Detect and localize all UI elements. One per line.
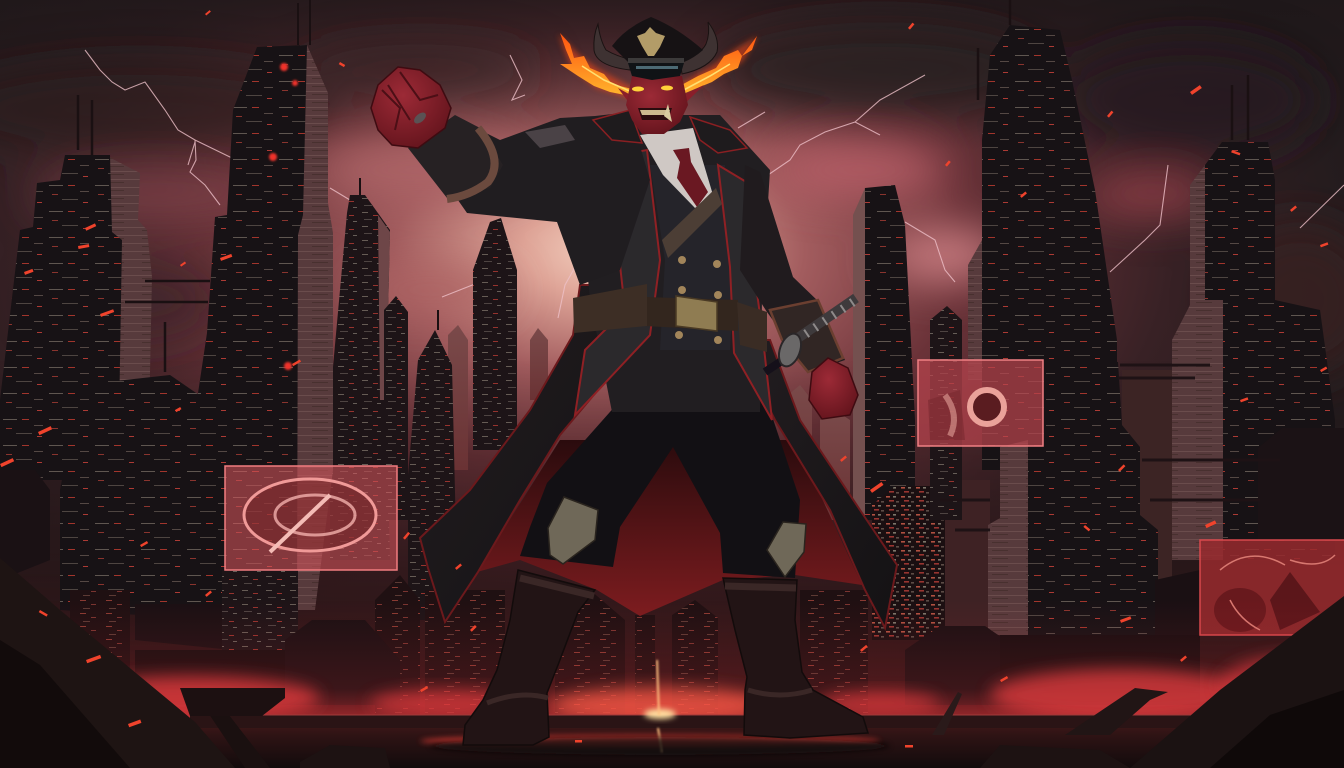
right foreground towers — [940, 0, 1344, 640]
ears — [618, 85, 704, 112]
rubble: left beams — [0, 558, 285, 768]
glowing eyes — [632, 86, 673, 92]
coat lining — [477, 440, 862, 616]
shoulder patch — [525, 125, 575, 148]
trousers — [520, 395, 800, 578]
hologram panel: left — [225, 466, 397, 570]
jacket buttons — [675, 256, 722, 344]
top storm darkness — [0, 0, 1344, 150]
arm cuff band — [447, 128, 495, 199]
officer cap — [612, 17, 703, 80]
hologram panel: lower right — [1200, 540, 1344, 635]
necktie — [673, 148, 708, 207]
utility belt — [573, 284, 767, 352]
rubble: right beams — [300, 596, 1344, 768]
forearm sleeve — [408, 115, 503, 198]
coat right flap — [735, 340, 897, 628]
cast shadow — [430, 737, 890, 755]
low city blocks — [0, 575, 1200, 720]
torso — [575, 115, 770, 412]
extended arm — [430, 112, 650, 285]
lowered arm bracer — [770, 300, 843, 372]
lowered arm — [740, 165, 845, 372]
rooftop platform — [190, 660, 1344, 768]
knee guards — [548, 497, 806, 577]
character: demon commander — [371, 17, 897, 755]
distant skyline — [150, 325, 1260, 640]
coat left flap — [420, 285, 640, 622]
jaw and teeth — [638, 104, 672, 122]
lowered fist — [809, 358, 858, 419]
horns — [594, 22, 718, 74]
head — [626, 76, 688, 134]
high collar — [593, 110, 747, 153]
left foreground towers — [0, 0, 438, 650]
raised fist — [371, 67, 451, 148]
low red smoke haze — [0, 600, 1344, 723]
katana hilt — [765, 298, 856, 372]
hologram panel: upper right — [918, 360, 1043, 446]
boot left — [463, 570, 595, 745]
boot straps — [487, 578, 812, 703]
boot right — [723, 578, 868, 738]
vest — [650, 165, 733, 350]
storm clouds — [0, 22, 1344, 380]
cross strap — [662, 188, 722, 258]
mid skyline towers — [330, 185, 962, 640]
shirt — [640, 128, 713, 208]
flames — [558, 33, 758, 98]
coat lapels with red piping — [575, 150, 772, 420]
dark dusk gradient behind lower city — [0, 360, 1344, 720]
lightning bolts — [85, 50, 1344, 318]
